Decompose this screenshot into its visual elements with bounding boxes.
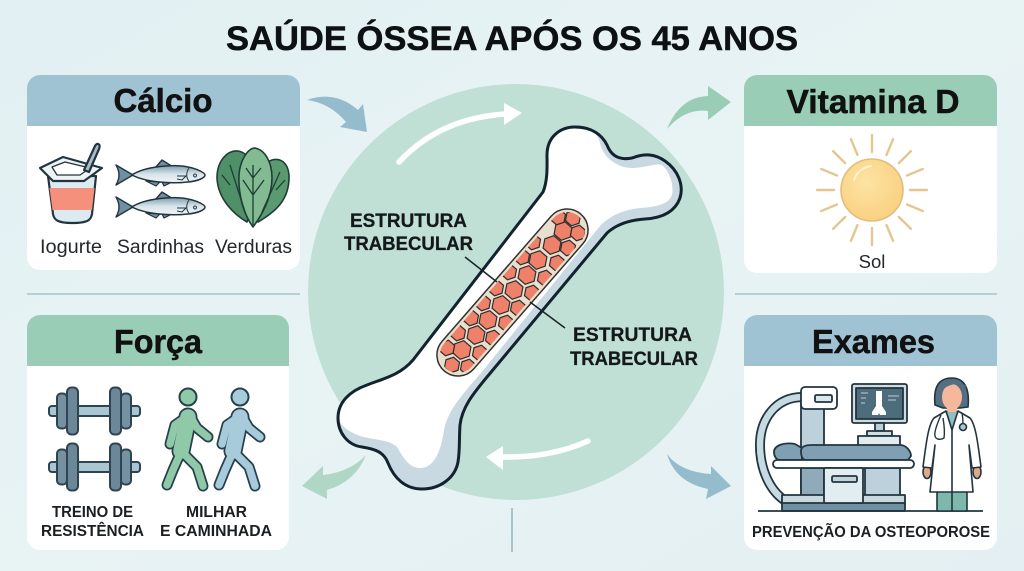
divider bottom [511, 508, 513, 552]
panel: exames [744, 315, 997, 550]
arrow: white cycle bottom [486, 441, 588, 470]
label: estrutura trabecular left: ESTRUTURA [350, 211, 467, 232]
label: treino de resistencia: RESISTÊNCIA [41, 521, 144, 540]
label: estrutura trabecular left: TRABECULAR [344, 234, 473, 255]
vitamina d header [744, 75, 997, 126]
label: milhar e caminhada: MILHAR [186, 504, 247, 521]
calcio header [27, 75, 300, 126]
trabecular cells [439, 208, 586, 376]
arrow: centre to forca [302, 455, 366, 499]
divider right [735, 293, 997, 295]
label: milhar e caminhada [160, 504, 272, 540]
icon: walker blue [219, 388, 260, 486]
arrow: centre to vitamina d [667, 86, 731, 129]
label: treino de resistencia: TREINO DE [52, 504, 133, 521]
icon: sardine bottom [116, 192, 205, 218]
forca header [27, 315, 289, 366]
divider left [27, 293, 300, 295]
arrow: calcio to centre [307, 97, 367, 132]
vitamina d heading: Vitamina D [786, 83, 960, 120]
label: prevencao da osteoporose: PREVENÇÃO DA OSTEOPOROSE [752, 521, 990, 541]
label: estrutura trabecular right: ESTRUTURA [573, 325, 692, 346]
leader line lower [530, 302, 565, 328]
panel: forca [27, 315, 289, 550]
label: sardinhas: Sardinhas [117, 237, 204, 258]
label: estrutura trabecular left [344, 211, 473, 255]
label: verduras: Verduras [215, 237, 292, 258]
icon: dumbbell bottom [49, 444, 140, 490]
label: sol: Sol [859, 251, 885, 272]
central circle [308, 84, 724, 500]
exames header [744, 315, 997, 366]
bone shadow [338, 127, 681, 489]
label: estrutura trabecular right [570, 325, 698, 370]
label: treino de resistencia [41, 504, 144, 540]
icon: dumbbell top [49, 388, 140, 434]
forca heading: Força [114, 323, 203, 360]
label: estrutura trabecular right: TRABECULAR [570, 349, 698, 370]
arrow: centre to exames [667, 454, 731, 499]
icon: doctor [923, 378, 981, 511]
icon: leafy greens [217, 148, 289, 227]
panel: calcio [27, 75, 300, 270]
label: milhar e caminhada: E CAMINHADA [160, 523, 272, 540]
calcio heading: Cálcio [114, 82, 212, 119]
panel: vitamina d [744, 75, 997, 273]
icon: yogurt [40, 144, 102, 223]
arrow: white cycle top [399, 103, 522, 162]
label: iogurte: Iogurte [40, 237, 102, 258]
icon: scanner machine [760, 384, 914, 511]
icon: sardine top [116, 160, 205, 186]
icon: sun [817, 135, 927, 245]
exames heading: Exames [812, 323, 935, 360]
icon: walker green [167, 388, 208, 486]
title: SAÚDE ÓSSEA APÓS OS 45 ANOS [226, 20, 798, 58]
bone white highlight [338, 127, 673, 468]
floor line [758, 510, 983, 512]
bone outline [338, 127, 681, 489]
bone [338, 127, 681, 489]
bone marrow capsule [428, 200, 597, 385]
leader line upper [465, 257, 497, 282]
